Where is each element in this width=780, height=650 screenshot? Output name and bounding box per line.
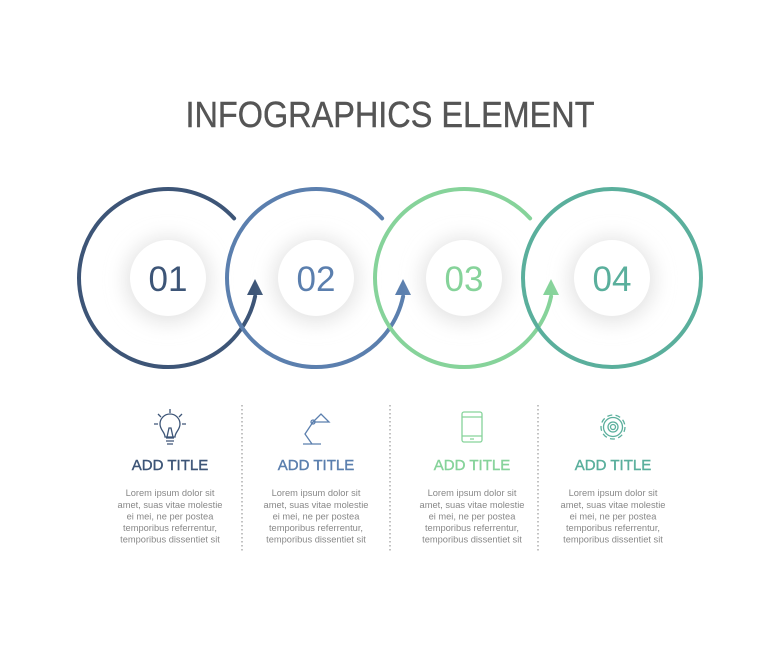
step 2 circle: 02 (297, 260, 335, 299)
icon: gear (601, 415, 625, 439)
column 1 text: ei mei, ne per postea (127, 512, 214, 522)
icon: desk lamp (303, 414, 329, 444)
column 3 text: ei mei, ne per postea (429, 512, 516, 522)
column 2 text: temporibus dissentiet sit (266, 534, 366, 544)
column 2 text: amet, suas vitae molestie (264, 500, 368, 510)
step 4 circle: 04 (593, 260, 631, 299)
column 1 text: temporibus referrentur, (123, 523, 217, 533)
step 3 circle: 03 (445, 260, 483, 299)
column 3 text: ADD TITLE (434, 457, 510, 474)
column 4 text: Lorem ipsum dolor sit (569, 488, 658, 498)
column 3 text (420, 457, 524, 544)
title: INFOGRAPHICS ELEMENT (186, 94, 595, 135)
column 1 text: ADD TITLE (132, 457, 208, 474)
column 4 text: ADD TITLE (575, 457, 651, 474)
column 1 text: amet, suas vitae molestie (118, 500, 222, 510)
column 2 text: ADD TITLE (278, 457, 354, 474)
column 2 text (264, 457, 368, 544)
column 3 text: Lorem ipsum dolor sit (428, 488, 517, 498)
column 1 text (118, 457, 222, 544)
step 4 circle (523, 189, 701, 367)
column 4 text: ei mei, ne per postea (570, 512, 657, 522)
icon: light bulb (154, 409, 186, 444)
column 4 text: amet, suas vitae molestie (561, 500, 665, 510)
step 1 circle (79, 189, 263, 367)
column 2 text: ei mei, ne per postea (273, 512, 360, 522)
column 1 text: Lorem ipsum dolor sit (126, 488, 215, 498)
column 4 text (561, 457, 665, 544)
column 4 text: temporibus dissentiet sit (563, 534, 663, 544)
column 2 text: Lorem ipsum dolor sit (272, 488, 361, 498)
column 3 text: temporibus dissentiet sit (422, 534, 522, 544)
column 1 text: temporibus dissentiet sit (120, 534, 220, 544)
step 3 circle (375, 189, 559, 367)
step 1 circle: 01 (149, 260, 187, 299)
column 3 text: amet, suas vitae molestie (420, 500, 524, 510)
step 2 circle (227, 189, 411, 367)
column 4 text: temporibus referrentur, (566, 523, 660, 533)
icon: tablet (462, 412, 482, 442)
column 2 text: temporibus referrentur, (269, 523, 363, 533)
column 3 text: temporibus referrentur, (425, 523, 519, 533)
